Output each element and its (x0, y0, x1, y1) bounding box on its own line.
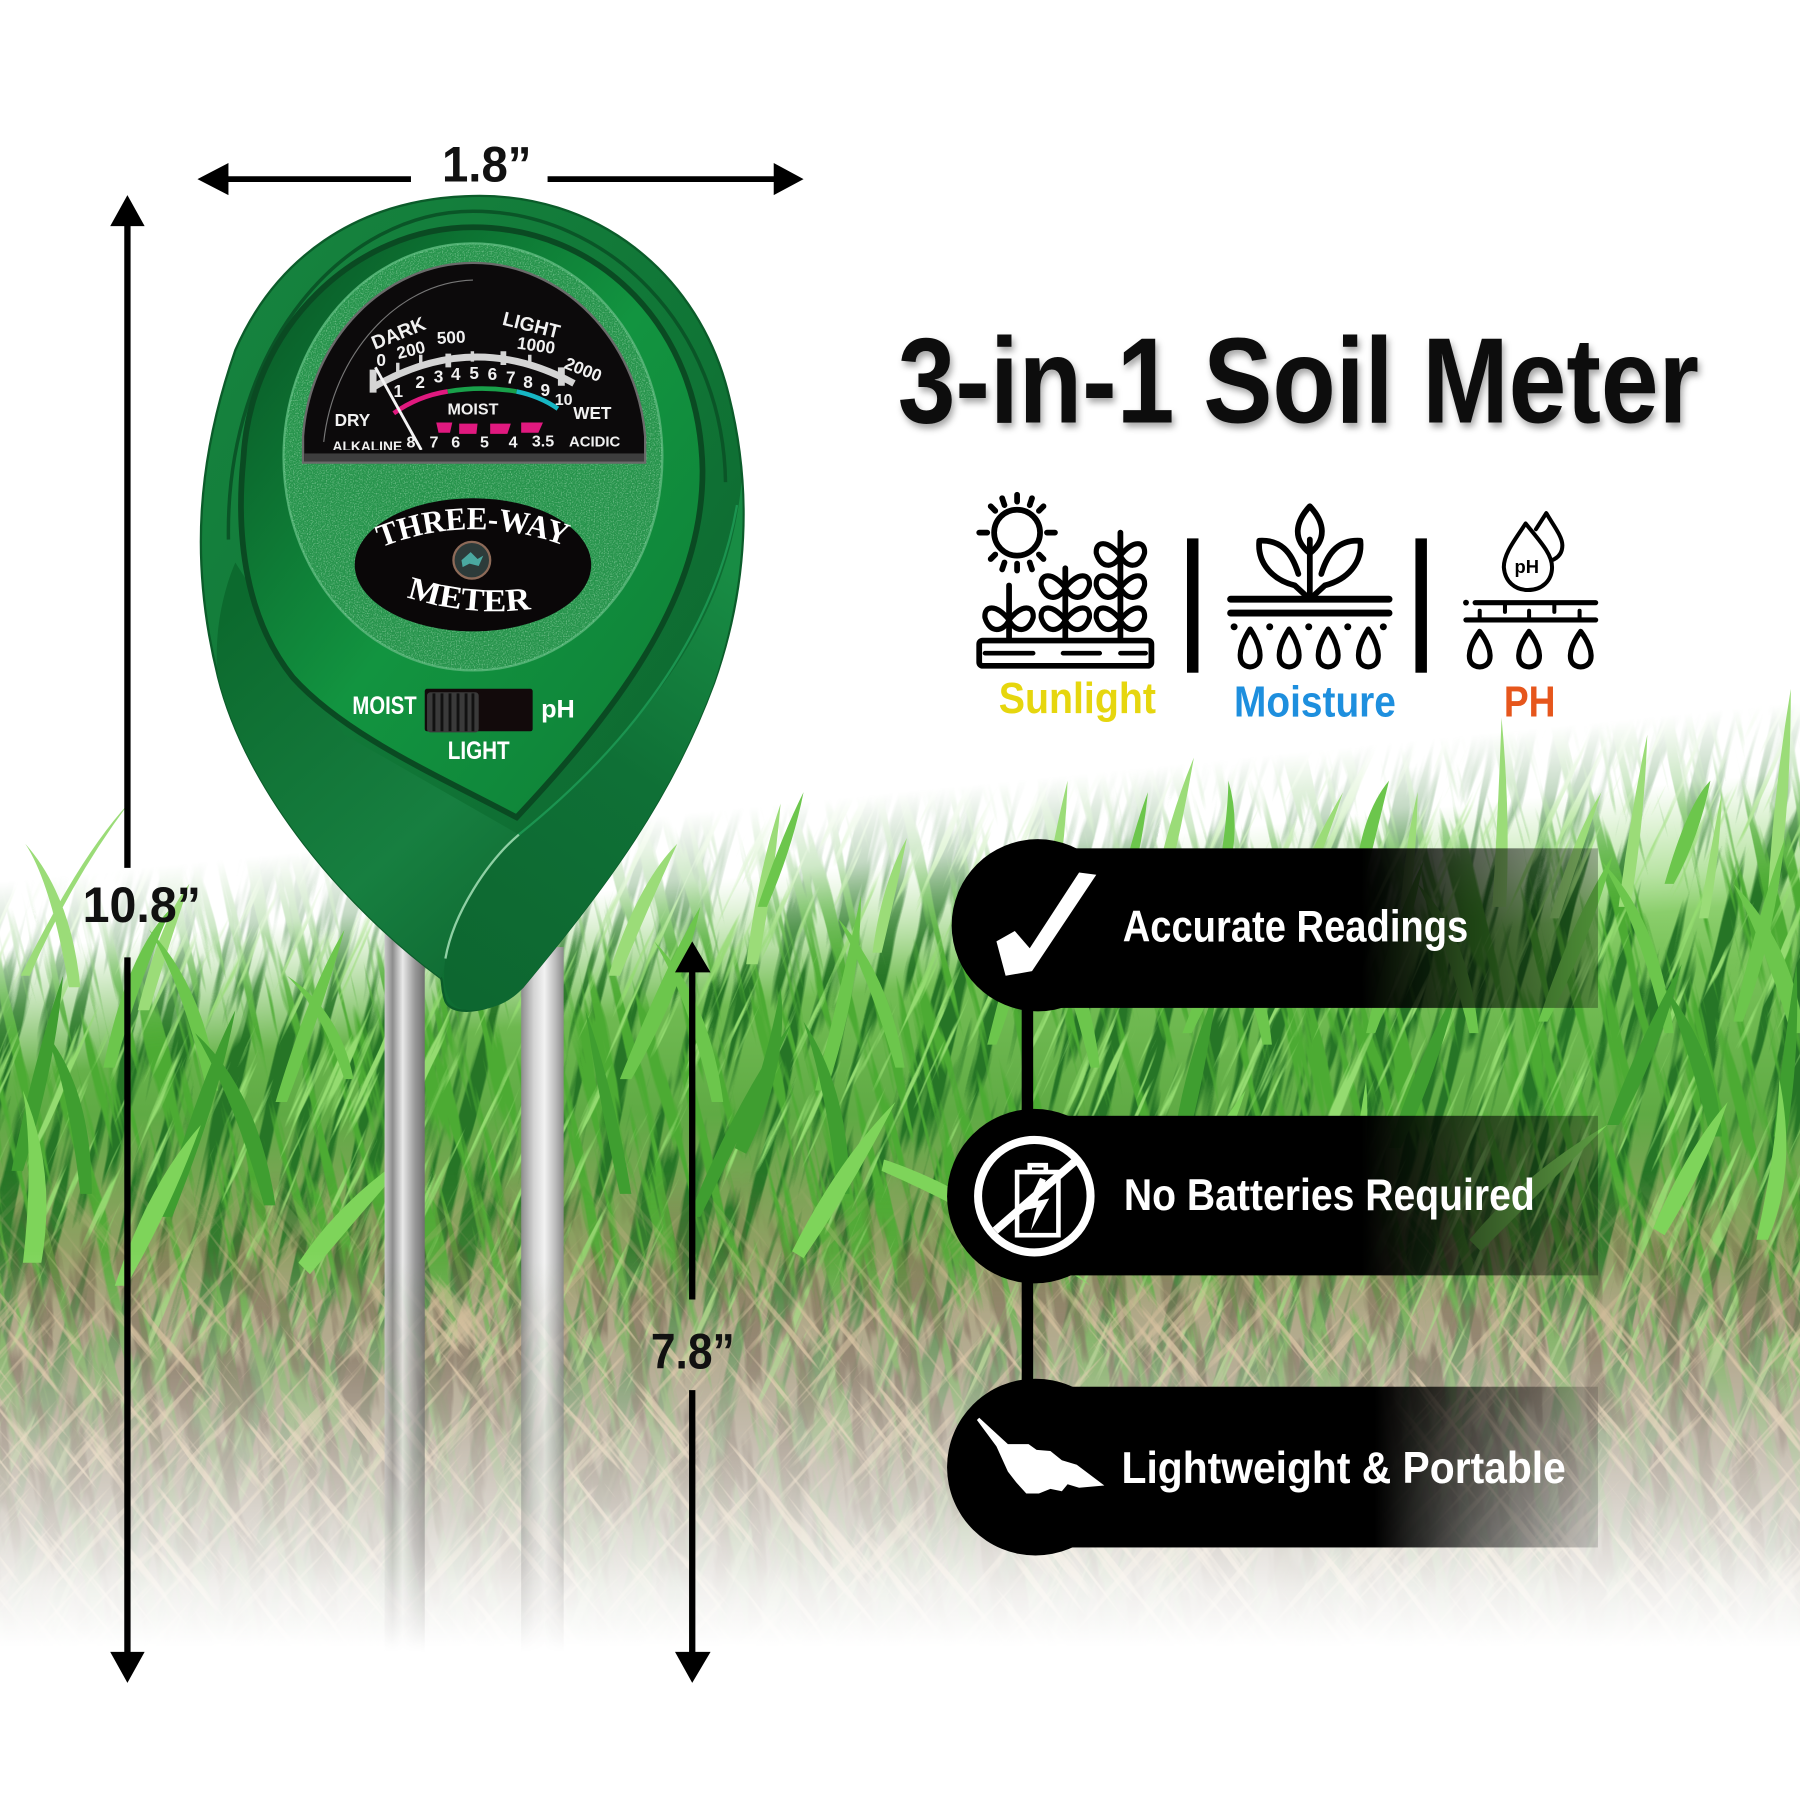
mode slider switch: MOIST (352, 692, 417, 720)
gauge dial: 8 (407, 434, 416, 452)
outer groove (228, 211, 726, 540)
feature: accurate readings (952, 839, 1598, 1011)
gauge dial: ALKALINE (333, 439, 402, 454)
gauge dial: 5 (480, 434, 489, 452)
mode slider switch: LIGHT (448, 737, 510, 765)
gauge dial: ACIDIC (569, 434, 621, 451)
divider one (1187, 538, 1198, 673)
feature: no batteries required (947, 1109, 1598, 1283)
icon: no battery (978, 1140, 1091, 1252)
divider two (1415, 538, 1427, 673)
gauge dial: 1 (394, 381, 404, 401)
feature: lightweight and portable (947, 1379, 1598, 1555)
gauge dial: 500 (436, 327, 466, 348)
probe length arrow: 7.8” (651, 1322, 735, 1379)
three-way oval badge: METER (407, 577, 532, 612)
soil meter device (200, 194, 745, 1012)
gauge dial: 2 (415, 372, 425, 392)
icon: moisture plant (1231, 506, 1389, 667)
gauge dial: 8 (523, 372, 533, 392)
gauge dial: WET (573, 403, 612, 423)
label: PH: PH (1504, 678, 1555, 726)
feature: lightweight and portable: Lightweight & Portable (1122, 1443, 1566, 1493)
height arrow: 10.8” (83, 876, 201, 933)
gauge dial: 200 (395, 337, 427, 363)
right probe (521, 947, 564, 1665)
flap upper edge (519, 505, 737, 835)
three-way oval badge (354, 498, 592, 632)
gauge dial: DRY (335, 410, 371, 430)
icon: pH drops: pH (1515, 556, 1539, 577)
gauge dial: 7 (429, 434, 438, 452)
feature: no batteries required: No Batteries Required (1124, 1170, 1535, 1220)
probe length arrow (651, 941, 735, 1683)
icon: check mark (996, 872, 1096, 976)
gauge dial: 6 (451, 434, 460, 452)
icon: sunlight plants (979, 495, 1151, 666)
three-way oval badge: THREE-WAY (374, 508, 571, 546)
gauge dial: 10 (555, 391, 573, 409)
meter body (201, 196, 744, 1011)
lower left body shell (217, 562, 519, 978)
width arrow: 1.8” (442, 135, 532, 192)
icon: feather (977, 1418, 1104, 1493)
flap highlight edge (445, 835, 519, 959)
label: Moisture: Moisture (1234, 678, 1396, 726)
gauge dial: DARK (368, 313, 429, 354)
gauge dial: 7 (506, 367, 516, 387)
width arrow (197, 135, 804, 195)
grass photo background (0, 689, 1800, 1676)
mode slider switch: pH (541, 695, 575, 723)
gauge dial (303, 263, 645, 463)
icon: pH drops (1466, 513, 1596, 667)
gauge dial: 6 (488, 364, 497, 384)
label: Sunlight: Sunlight (999, 675, 1156, 723)
front flap (444, 482, 743, 1010)
gauge dial: 3 (434, 366, 443, 386)
mode slider switch (352, 689, 575, 765)
gauge dial: 0 (376, 350, 386, 370)
left probe (385, 930, 425, 1665)
gauge dial: LIGHT (500, 308, 562, 344)
meter face (284, 243, 662, 670)
gauge dial: MOIST (448, 400, 499, 418)
gauge dial: 4 (451, 364, 461, 384)
gauge dial: 4 (509, 434, 518, 452)
height arrow (83, 195, 201, 1683)
feature: accurate readings: Accurate Readings (1123, 901, 1468, 951)
connector line (1022, 999, 1033, 1389)
gauge dial: 5 (469, 363, 479, 383)
gauge dial: 1000 (516, 333, 556, 358)
face texture (284, 243, 662, 670)
gauge dial: 9 (540, 380, 550, 400)
gauge dial: 2000 (562, 353, 605, 386)
gauge dial: 3.5 (532, 433, 554, 451)
recessed panel (241, 227, 703, 817)
